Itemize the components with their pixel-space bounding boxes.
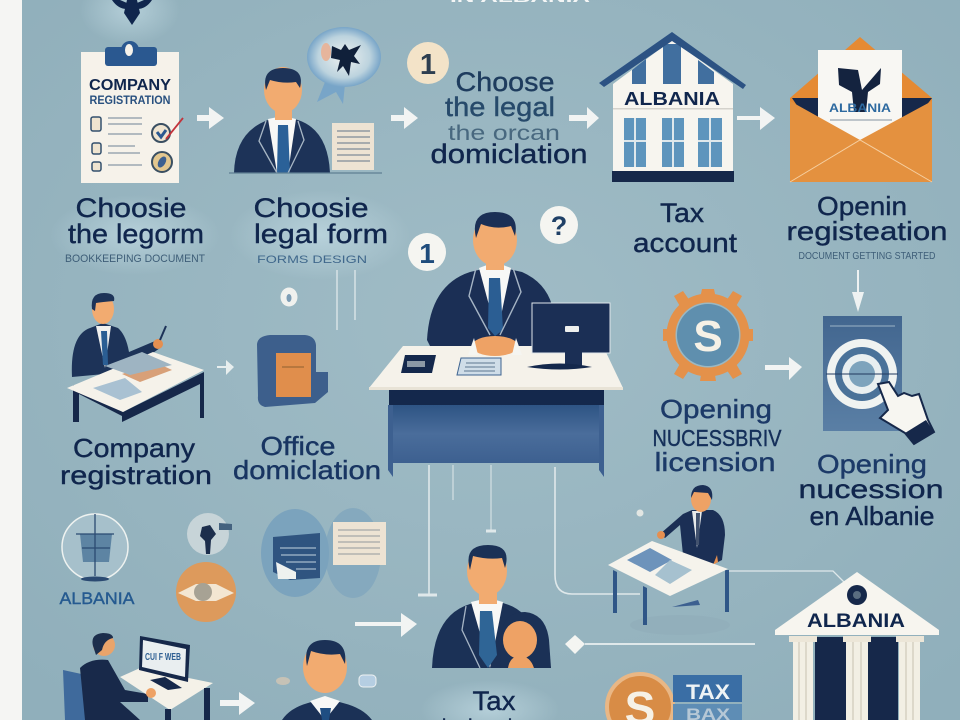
arrow xyxy=(197,107,224,129)
text: opening necessary licension: licension xyxy=(654,447,776,477)
text: openin registeation: registeation xyxy=(786,216,948,246)
text: company registration: Company xyxy=(73,433,195,463)
arrow small xyxy=(217,360,234,375)
arrow down xyxy=(852,270,864,312)
icon: registration clipboard: REGISTRATION xyxy=(90,93,170,107)
badge: question mark xyxy=(540,206,578,244)
person with child xyxy=(432,545,551,668)
text: opening necession en Albanie: en Albanie xyxy=(810,501,934,531)
icon: orange envelope with letter: ALBANIA xyxy=(829,101,891,115)
text: openin registeation: DOCUMENT GETTING STARTED xyxy=(798,251,936,262)
text: choose the legal domiclation: the legal xyxy=(445,92,555,122)
icon: drop badge xyxy=(280,288,298,306)
icon: registration clipboard: COMPANY xyxy=(89,77,171,94)
icon: eagle emblem top xyxy=(112,0,152,25)
text: opening necession en Albanie: nucession xyxy=(798,474,944,504)
person with speech bubble and document xyxy=(229,27,382,173)
icon: office briefcase xyxy=(257,335,328,407)
icon: registration clipboard xyxy=(81,41,183,183)
text: choose the legal domiclation: Choose xyxy=(456,67,554,97)
icon: licence gear xyxy=(663,289,753,381)
text: tax account: Tax xyxy=(660,198,705,228)
icon: Albania bank: ALBANIA xyxy=(807,611,905,632)
text: choosie legal form: FORMS DESIGN xyxy=(257,254,367,266)
person bottom xyxy=(276,640,376,720)
badge: number 1 white xyxy=(408,233,446,271)
icon: Albania bank xyxy=(775,572,939,720)
text: tax declaration clipped xyxy=(435,686,535,720)
person at drafting desk xyxy=(67,293,204,422)
arrow xyxy=(765,357,802,380)
text: tax account xyxy=(633,198,738,258)
monitor xyxy=(527,303,610,370)
icon: Albania building: ALBANIA xyxy=(624,89,720,109)
text: tax declaration clipped: Tax xyxy=(472,686,516,716)
text: openin registeation: Openin xyxy=(817,191,907,221)
connector with diamond xyxy=(565,635,755,654)
arrow xyxy=(391,107,418,129)
icon: tax label xyxy=(673,675,742,720)
icon: tax label: TAX xyxy=(686,681,730,704)
text: office domiclation: domiclation xyxy=(233,455,381,485)
text: office domiclation xyxy=(233,431,381,485)
connector lines under central desk xyxy=(418,465,846,595)
text: opening necession en Albanie: Opening xyxy=(817,449,927,479)
arrow xyxy=(220,692,255,715)
text: choosie the legorm xyxy=(65,193,205,265)
desk xyxy=(369,346,623,477)
person seated at computer xyxy=(63,633,213,720)
person at table right xyxy=(608,485,730,635)
icon: orange emblem circle xyxy=(176,562,236,622)
text: choosie the legorm: the legorm xyxy=(68,219,204,249)
badge: number 1 white: 1 xyxy=(419,238,435,269)
arrow xyxy=(569,107,599,129)
icon: globe with flag stand xyxy=(62,514,128,582)
text: choosie legal form: legal form xyxy=(254,219,388,249)
icon: small emblem circle xyxy=(187,513,232,555)
icon: small lamp xyxy=(636,510,644,516)
icon: orange envelope with letter xyxy=(790,37,932,182)
icon: Albania building xyxy=(599,32,746,182)
text: tax account: account xyxy=(633,228,738,258)
text: office domiclation: Office xyxy=(260,431,336,461)
text: opening necession en Albanie xyxy=(798,449,944,531)
connector lines top centre xyxy=(337,270,355,330)
text: choose the legal domiclation: domiclation xyxy=(430,139,588,169)
text: choose the legal domiclation xyxy=(430,67,588,169)
text: choose the legal domiclation: the orcan xyxy=(448,122,560,145)
label: Albania: ALBANIA xyxy=(60,589,135,608)
icon: documents in blue circles xyxy=(261,508,386,598)
text: opening necessary licension xyxy=(652,394,782,477)
icon: licence gear: S xyxy=(693,312,723,361)
text: company registration xyxy=(60,433,212,490)
text: openin registeation xyxy=(786,191,948,262)
central person at desk xyxy=(369,212,623,477)
badge: number 1 beige xyxy=(407,42,449,84)
text: choosie the legorm: BOOKKEEPING DOCUMENT xyxy=(65,253,205,265)
arrow xyxy=(737,107,775,130)
text: company registration: registration xyxy=(60,460,212,490)
text: choosie legal form xyxy=(254,193,388,266)
icon: target screen with hand pointer xyxy=(823,316,934,444)
arrow xyxy=(355,613,417,637)
text: opening necessary licension: Opening xyxy=(660,394,772,424)
text: choosie legal form: Choosie xyxy=(254,193,368,223)
badge: number 1 beige: 1 xyxy=(420,49,436,81)
text: choosie the legorm: Choosie xyxy=(76,193,186,223)
badge: question mark: ? xyxy=(551,211,567,241)
text: opening necessary licension: NUCESSBRIV xyxy=(652,425,782,451)
icon: tax coin xyxy=(607,674,673,720)
person seated at computer: CUI F WEB xyxy=(145,652,181,663)
